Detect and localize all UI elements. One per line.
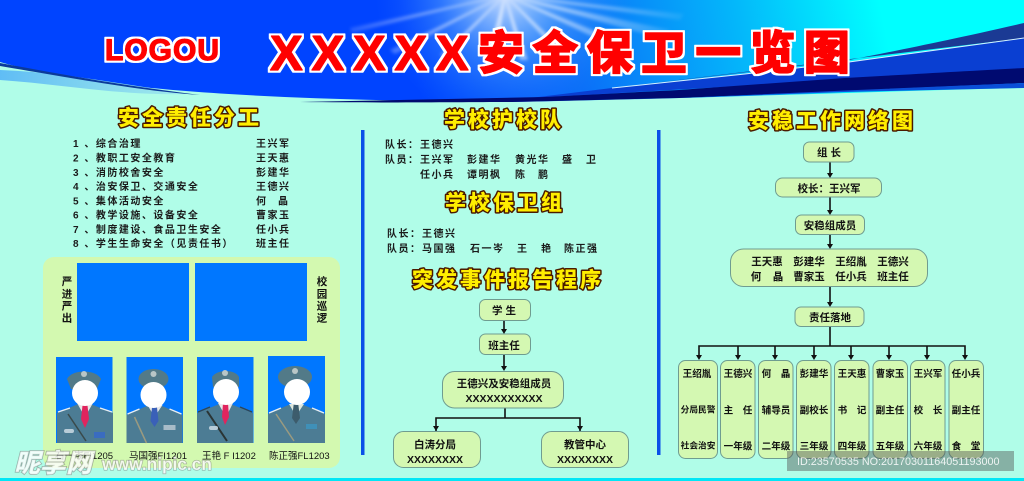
node: group leader: 组 长 <box>817 146 841 159</box>
portrait captions <box>55 450 330 462</box>
patrol team members: 王德兴 <box>420 138 454 151</box>
patrol team members: 谭明枫 <box>467 168 502 181</box>
left divider <box>361 130 364 455</box>
responsibilities list: 晶 <box>278 196 290 208</box>
column 3: 何 晶 <box>762 368 790 380</box>
column 7 <box>910 360 945 458</box>
node: member names: 晶 <box>773 271 783 283</box>
column 3: 二年级 <box>762 440 791 452</box>
portrait captions: 马国强FI1201 <box>129 451 187 462</box>
side label left: 严 <box>62 300 72 312</box>
node: education center: XXXXXXXX <box>557 454 613 466</box>
header banner <box>0 0 1024 102</box>
security group members: 马国强 <box>422 243 456 255</box>
responsibilities list: 2 、教职工安全教育 <box>73 152 176 164</box>
column 8: 任小兵 <box>952 368 981 380</box>
column 8: 副主任 <box>952 404 981 416</box>
patrol team members: 陈 <box>515 168 526 181</box>
column 8 <box>949 360 984 458</box>
node: principal <box>776 178 882 197</box>
security group members: 艳 <box>541 242 552 255</box>
watermark: image id <box>787 451 1014 471</box>
patrol team members: 队员： <box>385 153 420 166</box>
title <box>270 27 858 81</box>
patrol team members <box>385 138 598 181</box>
patrol team members: 队长： <box>385 138 420 151</box>
responsibilities list: 何 <box>256 194 268 208</box>
column 3: 辅导员 <box>762 404 791 416</box>
node: responsibility: 责任落地 <box>809 311 851 324</box>
column 8: 食 堂 <box>952 440 981 452</box>
column 1: 社会治安 <box>681 440 716 450</box>
watermark: site: 昵享网 <box>14 448 96 478</box>
column 2: 一年级 <box>724 440 753 452</box>
node: police: 白涛分局 <box>414 438 456 451</box>
responsibilities list: 班主任 <box>256 237 290 250</box>
network flowchart <box>678 142 984 458</box>
patrol team members: 彭建华 <box>467 153 502 166</box>
node: member names: 彭建华 <box>793 255 825 268</box>
security group members: 王 <box>517 243 528 255</box>
node: group leader <box>804 142 854 162</box>
security group members: 队长： <box>387 227 422 240</box>
node: member names: 曹家玉 <box>793 270 825 283</box>
responsibilities list: 曹家玉 <box>256 208 290 222</box>
column 7: 王兴军 <box>914 368 942 380</box>
node: police <box>394 432 480 468</box>
column 5: 王天惠 <box>838 368 867 380</box>
heading: safety responsibilities: 安全责任分工 <box>118 106 262 130</box>
column 5 <box>834 360 869 458</box>
node: member names <box>730 249 928 286</box>
security group members <box>387 227 598 255</box>
node: responsibility <box>795 307 864 326</box>
responsibilities list: 6 、教学设施、设备安全 <box>73 208 199 222</box>
title: XXXXX <box>270 27 477 81</box>
responsibilities list: 3 、消防校舍安全 <box>73 166 165 179</box>
responsibilities list: 4 、治安保卫、交通安全 <box>73 180 199 193</box>
patrol team members: 鹏 <box>538 168 550 181</box>
column 5: 书 记 <box>838 404 867 416</box>
column 7: 六年级 <box>914 440 943 452</box>
node: principal: 校长：王兴军 <box>798 182 860 195</box>
column 2 <box>720 360 755 458</box>
portrait captions: 石一岑FI1205 <box>55 450 113 462</box>
security group members: 陈正强 <box>564 242 598 255</box>
node: member names: 王德兴 <box>877 255 909 268</box>
connector lines <box>699 162 965 358</box>
side label right: 巡 <box>317 300 328 312</box>
column 6: 曹家玉 <box>876 368 905 380</box>
watermark: site: www.nipic.cn <box>101 454 212 474</box>
node: member names: 王天惠 <box>751 255 783 268</box>
column 1 <box>678 360 718 458</box>
node: leadership: 王德兴及安稳组成员 <box>457 377 551 390</box>
column 4: 副校长 <box>800 404 829 416</box>
node: member names: 班主任 <box>877 270 909 283</box>
right divider <box>657 130 660 455</box>
node: head teacher: 班主任 <box>488 339 520 352</box>
portrait 2 <box>126 357 183 443</box>
portrait 3 <box>197 357 254 443</box>
title: 安全保卫一览图 <box>478 27 858 79</box>
responsibilities list: 5 、集体活动安全 <box>73 194 165 208</box>
patrol team members: 卫 <box>586 154 598 166</box>
panel: photos <box>43 257 340 468</box>
responsibilities list: 王兴军 <box>256 137 290 150</box>
responsibilities list: 1 、综合治理 <box>73 137 142 150</box>
responsibilities list: 7 、制度建设、食品卫生安全 <box>73 223 222 236</box>
side label right: 园 <box>317 288 327 300</box>
heading: network chart: 安稳工作网络图 <box>748 109 916 133</box>
column 6 <box>873 360 908 458</box>
column 4: 三年级 <box>800 440 829 452</box>
heading: emergency procedure: 突发事件报告程序 <box>412 268 604 292</box>
column 1: 分局民警 <box>681 404 716 414</box>
responsibilities list: 王德兴 <box>256 180 290 193</box>
side label left: 进 <box>62 288 73 300</box>
portrait 1 <box>56 357 113 443</box>
node: student <box>480 300 530 320</box>
node: police: XXXXXXXX <box>407 454 463 466</box>
portrait captions: 王艳 F I1202 <box>202 450 256 462</box>
side label left: 出 <box>62 312 72 324</box>
node: leadership <box>442 372 564 408</box>
node: head teacher <box>480 334 530 354</box>
side label right: 校 <box>317 275 328 288</box>
security group members: 队员： <box>387 242 422 255</box>
node: leadership: XXXXXXXXXXX <box>465 393 543 405</box>
node: members <box>796 215 864 234</box>
watermark: image id: ID:23570535 NO:20170301164051193000 <box>797 456 1000 468</box>
column 1: 王绍胤 <box>683 368 712 380</box>
emergency flowchart <box>394 300 628 468</box>
column 2: 主 任 <box>724 404 753 416</box>
side label left: 严 <box>62 276 72 288</box>
portrait captions: 陈正强FL1203 <box>269 450 330 462</box>
patrol team members: 黄光华 <box>515 153 550 166</box>
security group members: 王德兴 <box>422 227 456 240</box>
column 7: 校 长 <box>914 404 943 416</box>
patrol team members: 王兴军 <box>420 153 454 166</box>
responsibilities list: 任小兵 <box>256 223 290 236</box>
node: member names: 何 <box>751 270 762 283</box>
photo placeholder right <box>195 263 307 341</box>
column 3 <box>758 360 793 458</box>
patrol team members: 任小兵 <box>420 168 454 181</box>
responsibilities list: 8 、学生生命安全（见责任书） <box>73 237 234 250</box>
responsibilities list: 彭建华 <box>256 166 290 179</box>
column 2: 王德兴 <box>724 368 753 380</box>
node: education center: 教管中心 <box>564 438 606 451</box>
photo placeholder left <box>77 263 189 341</box>
heading: patrol team: 学校护校队 <box>444 108 564 132</box>
node: education center <box>542 432 628 468</box>
node: members: 安稳组成员 <box>804 219 856 232</box>
node: member names: 王绍胤 <box>835 255 867 268</box>
side label right: 逻 <box>317 312 328 324</box>
node: student: 学 生 <box>492 304 516 317</box>
security group members: 石一岑 <box>470 242 504 255</box>
portrait 4 <box>268 356 325 443</box>
patrol team members: 盛 <box>562 153 574 166</box>
heading: security group: 学校保卫组 <box>445 191 565 215</box>
column 6: 副主任 <box>876 404 905 416</box>
watermark: site <box>14 448 212 478</box>
column 4 <box>796 360 831 458</box>
logo text: LOGOU <box>105 34 220 67</box>
bottom strip <box>0 478 1024 481</box>
responsibilities list <box>73 137 290 250</box>
responsibilities list: 王天惠 <box>256 152 290 164</box>
column 5: 四年级 <box>838 440 867 452</box>
node: member names: 任小兵 <box>835 270 867 283</box>
connector lines <box>436 320 580 431</box>
column 6: 五年级 <box>876 440 905 452</box>
column 4: 彭建华 <box>800 368 829 380</box>
